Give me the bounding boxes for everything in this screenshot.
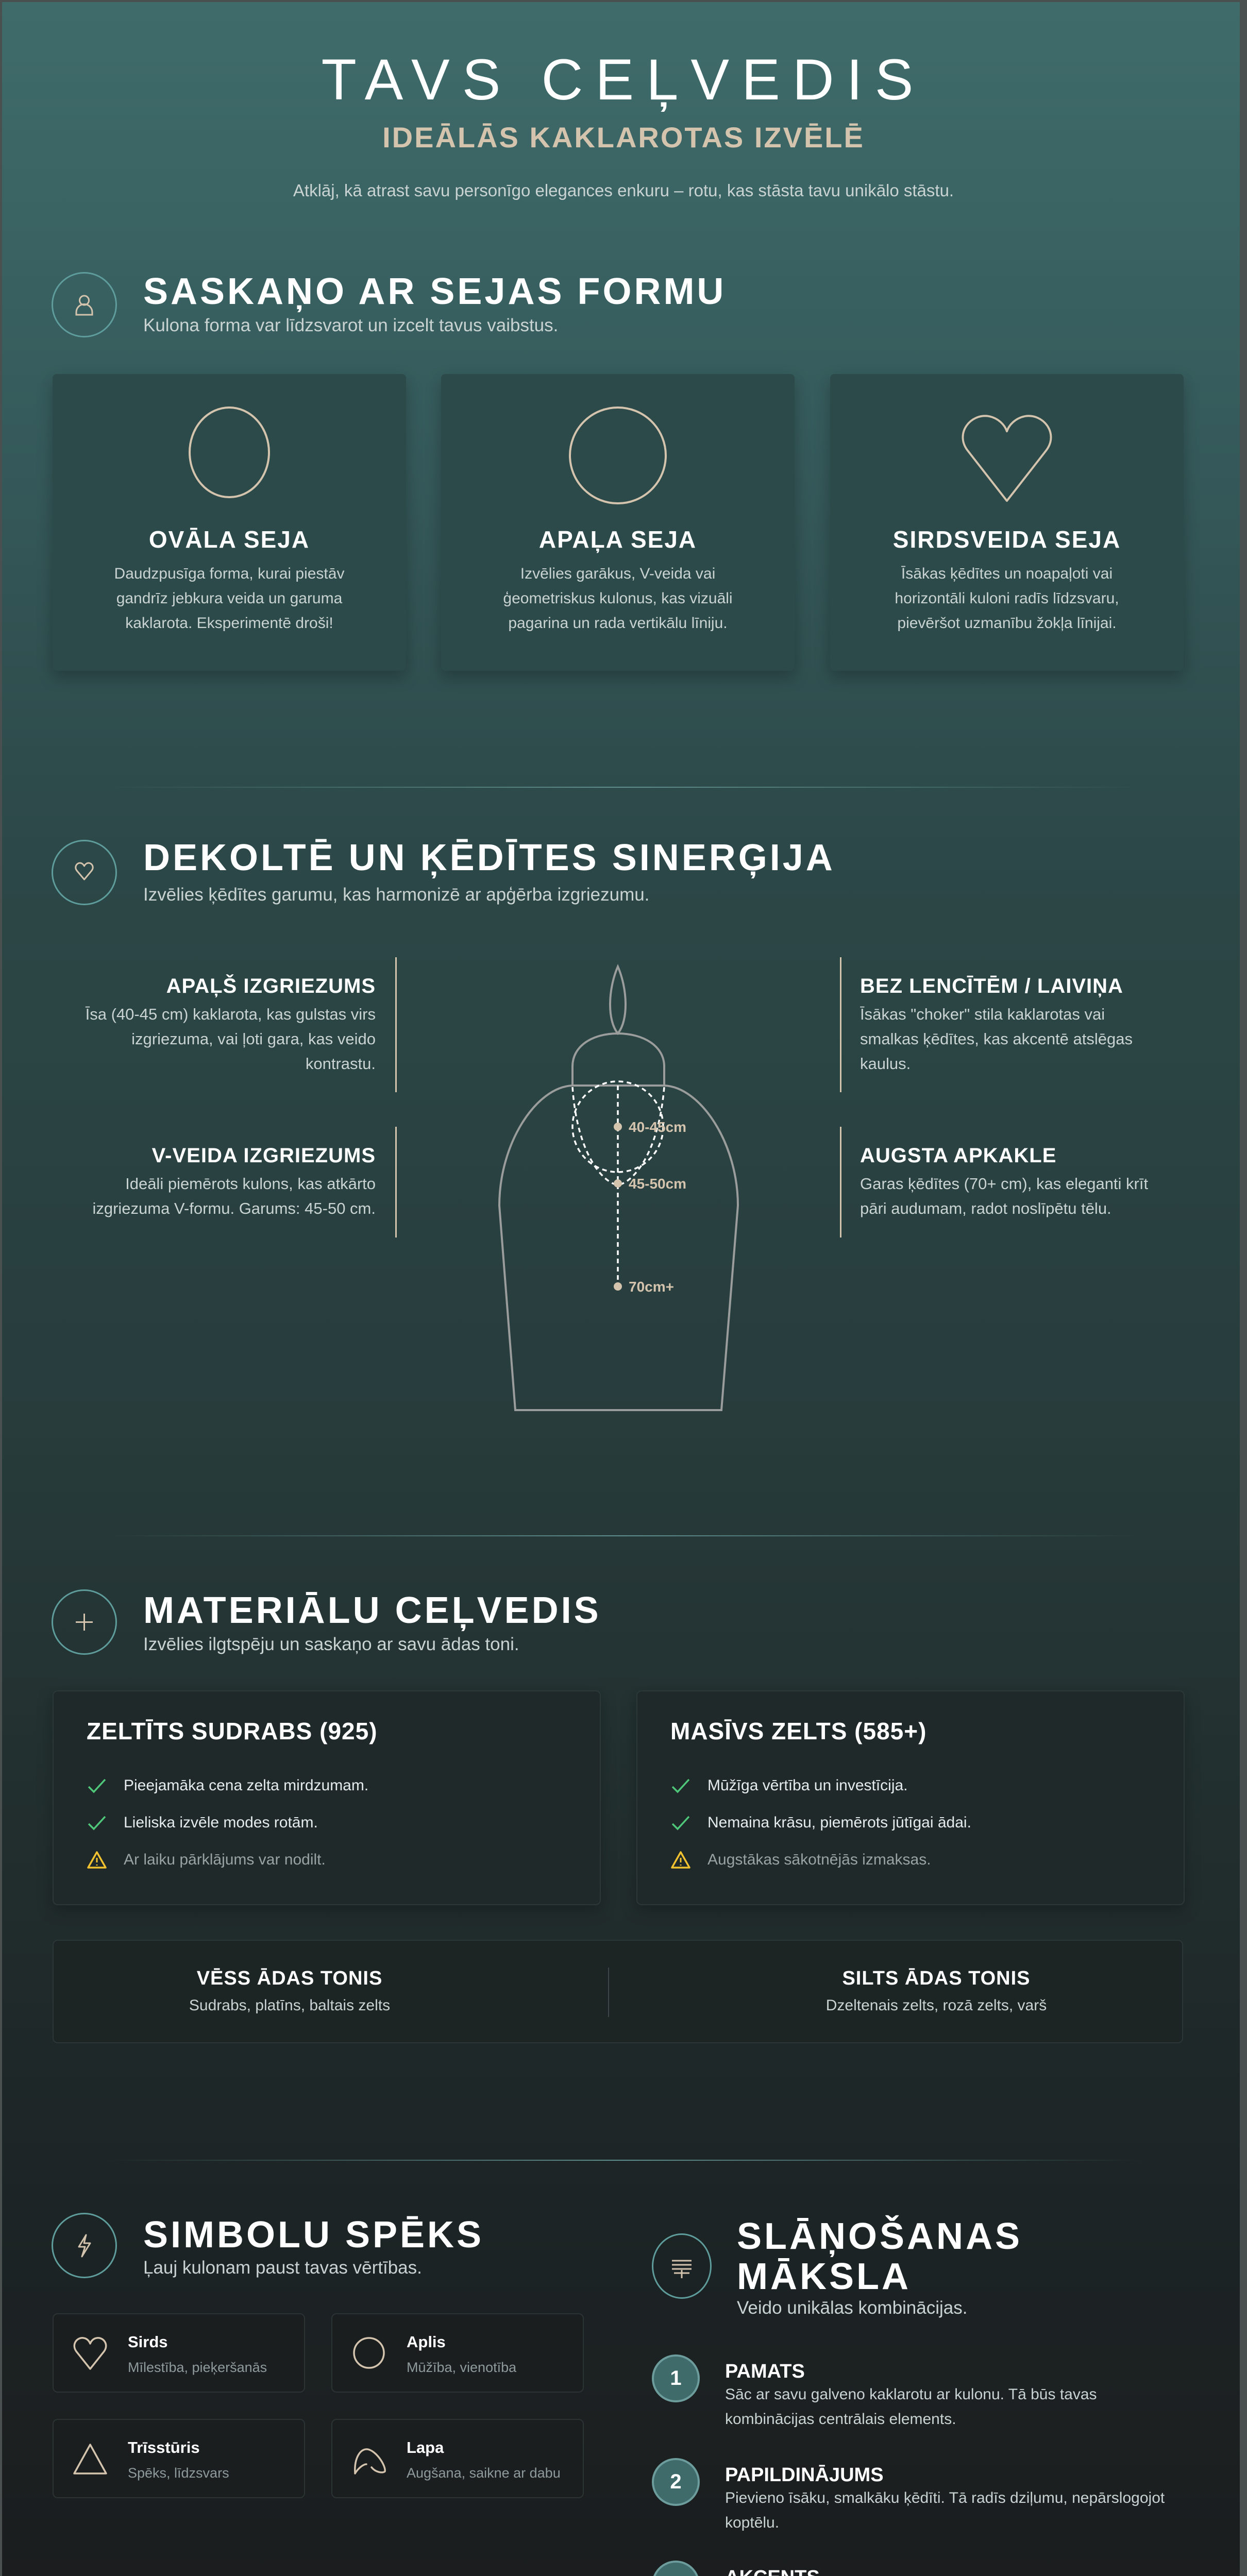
warm tone: SILTS ĀDAS TONIS xyxy=(842,1968,1031,1989)
step 3 xyxy=(653,2561,820,2576)
card: round face: Izvēlies garākus, V-veida vai ģeometriskus kulonus, kas vizuāli pagarina un rada vertikālu līniju. xyxy=(503,565,733,632)
symbol card: heart: Mīlestība, pieķeršanās xyxy=(128,2360,267,2375)
symbol card: triangle: Trīsstūris xyxy=(128,2438,200,2456)
cool tone: Sudrabs, platīns, baltais zelts xyxy=(189,1997,390,2014)
subheading: Veido unikālas kombinācijas. xyxy=(737,2298,967,2318)
card: heart face: Īsākas ķēdītes un noapaļoti vai horizontāli kuloni radīs līdzsvaru, pievēršot uzmanību žokļa līnijai. xyxy=(895,565,1119,632)
text: round neckline: Īsa (40-45 cm) kaklarota, kas gulstas virs izgriezuma, vai ļoti gara, kas veido kontrastu. xyxy=(86,1005,376,1073)
heading: SIMBOLU SPĒKS xyxy=(143,2214,484,2256)
list item: Pieejamāka cena zelta mirdzumam. xyxy=(124,1777,368,1794)
text: round neckline: APAĻŠ IZGRIEZUMS xyxy=(166,975,376,997)
step 1: 1 xyxy=(670,2367,682,2389)
card: solid gold: MASĪVS ZELTS (585+) xyxy=(670,1718,926,1744)
text: strapless xyxy=(840,957,1159,1092)
section 4: symbols xyxy=(52,2213,484,2278)
card: oval face: OVĀLA SEJA xyxy=(149,526,310,553)
card: oval face xyxy=(53,374,406,671)
text: high collar: Garas ķēdītes (70+ cm), kas eleganti krīt pāri audumam, radot noslīpētu tēlu. xyxy=(860,1175,1148,1217)
chart: body silhouette with necklace lengths xyxy=(498,964,739,1411)
symbol card: circle: Aplis xyxy=(407,2333,446,2351)
step 2: 2 xyxy=(670,2470,682,2493)
text: high collar xyxy=(840,1127,1175,1238)
tagline: Atklāj, kā atrast savu personīgo elegances enkuru – rotu, kas stāsta tavu unikālo stāstu. xyxy=(293,181,954,200)
symbol card: circle: Mūžība, vienotība xyxy=(407,2360,516,2375)
heading: DEKOLTĒ UN ĶĒDĪTES SINERĢIJA xyxy=(143,837,835,878)
heading: SLĀŅOŠANAS xyxy=(737,2216,1022,2257)
title: TAVS CEĻVEDIS xyxy=(322,47,925,112)
text: round neckline xyxy=(67,957,397,1092)
symbol card: triangle: Spēks, līdzsvars xyxy=(128,2465,229,2481)
step 1 xyxy=(652,2354,1097,2428)
list item: Lieliska izvēle modes rotām. xyxy=(124,1814,318,1831)
text: strapless: BEZ LENCĪTĒM / LAIVIŅA xyxy=(860,975,1123,997)
text: high collar: AUGSTA APKAKLE xyxy=(860,1144,1056,1167)
icon: layers xyxy=(652,2233,712,2299)
cool tone xyxy=(189,1968,390,2014)
symbol card: circle xyxy=(331,2313,584,2393)
text: v neckline: Ideāli piemērots kulons, kas atkārto izgriezuma V-formu. Garums: 45-50 cm. xyxy=(92,1175,376,1217)
symbol card: leaf: Lapa xyxy=(407,2438,444,2456)
card: solid gold xyxy=(636,1690,1185,1905)
symbol card: leaf xyxy=(331,2419,584,2498)
card: heart face xyxy=(830,374,1184,671)
subheading: Izvēlies ilgtspēju un saskaņo ar savu ādas toni. xyxy=(143,1634,519,1654)
list item: Mūžīga vērtība un investīcija. xyxy=(707,1777,908,1794)
icon: plus xyxy=(52,1589,117,1655)
symbol card: triangle xyxy=(53,2419,305,2498)
text: strapless: Īsākas "choker" stila kaklarotas vai smalkas ķēdītes, kas akcentē atslēgas kaulus. xyxy=(860,1005,1133,1073)
step 1: PAMATS xyxy=(725,2361,805,2382)
cool tone: VĒSS ĀDAS TONIS xyxy=(197,1968,382,1989)
icon: circle xyxy=(569,406,667,504)
list item: Augstākas sākotnējās izmaksas. xyxy=(707,1851,931,1868)
subheading: Izvēlies ķēdītes garumu, kas harmonizē ar apģērba izgriezumu. xyxy=(143,885,649,905)
chart: body silhouette with necklace lengths: 45-50cm xyxy=(629,1176,686,1192)
list item: Ar laiku pārklājums var nodilt. xyxy=(124,1851,326,1868)
icon: person xyxy=(52,272,117,337)
subheading: Kulona forma var līdzsvarot un izcelt tavus vaibstus. xyxy=(143,315,558,335)
step 2 xyxy=(652,2458,1165,2531)
chart: body silhouette with necklace lengths: 70cm+ xyxy=(629,1279,674,1295)
step 1: Sāc ar savu galveno kaklarotu ar kulonu. Tā būs tavas kombinācijas centrālais elements. xyxy=(725,2386,1097,2428)
card: oval face: Daudzpusīga forma, kurai piestāv gandrīz jebkura veida un garuma kaklarota. Eksperimentē droši! xyxy=(114,565,344,632)
card: round face: APAĻA SEJA xyxy=(539,526,697,553)
step 2: PAPILDINĀJUMS xyxy=(725,2464,884,2486)
card: gold-plated silver xyxy=(53,1690,601,1905)
section 2: neckline xyxy=(52,837,835,905)
heading xyxy=(737,2215,1022,2297)
symbol card: heart: Sirds xyxy=(128,2333,168,2351)
list item: Nemaina krāsu, piemērots jūtīgai ādai. xyxy=(707,1814,971,1831)
chart: body silhouette with necklace lengths: 40-45cm xyxy=(629,1119,686,1135)
warm tone xyxy=(826,1968,1047,2014)
icon: heart xyxy=(962,415,1052,502)
warm tone: Dzeltenais zelts, rozā zelts, varš xyxy=(826,1997,1047,2014)
heading: MATERIĀLU CEĻVEDIS xyxy=(143,1590,601,1631)
panel: skin tones xyxy=(53,1940,1183,2043)
section 4b: layering xyxy=(652,2215,1022,2318)
card: heart face: SIRDSVEIDA SEJA xyxy=(893,526,1121,553)
subtitle: IDEĀLĀS KAKLAROTAS IZVĒLĒ xyxy=(382,121,865,154)
section 1: face shape xyxy=(52,271,726,337)
symbol card: leaf: Augšana, saikne ar dabu xyxy=(407,2465,561,2481)
icon: heart xyxy=(52,840,117,905)
step 2: Pievieno īsāku, smalkāku ķēdīti. Tā radīs dziļumu, nepārslogojot koptēlu. xyxy=(725,2489,1165,2531)
card: round face xyxy=(441,374,795,671)
section 3: materials xyxy=(52,1589,601,1655)
heading: MĀKSLA xyxy=(737,2256,911,2297)
text: v neckline: V-VEIDA IZGRIEZUMS xyxy=(152,1144,376,1167)
card: gold-plated silver: ZELTĪTS SUDRABS (925) xyxy=(87,1718,378,1744)
icon: lightning xyxy=(52,2213,117,2278)
symbol card: heart xyxy=(53,2313,305,2393)
subheading: Ļauj kulonam paust tavas vērtības. xyxy=(143,2258,422,2278)
icon: oval xyxy=(189,406,270,498)
heading: SASKAŅO AR SEJAS FORMU xyxy=(143,271,726,312)
text: v neckline xyxy=(67,1127,397,1238)
